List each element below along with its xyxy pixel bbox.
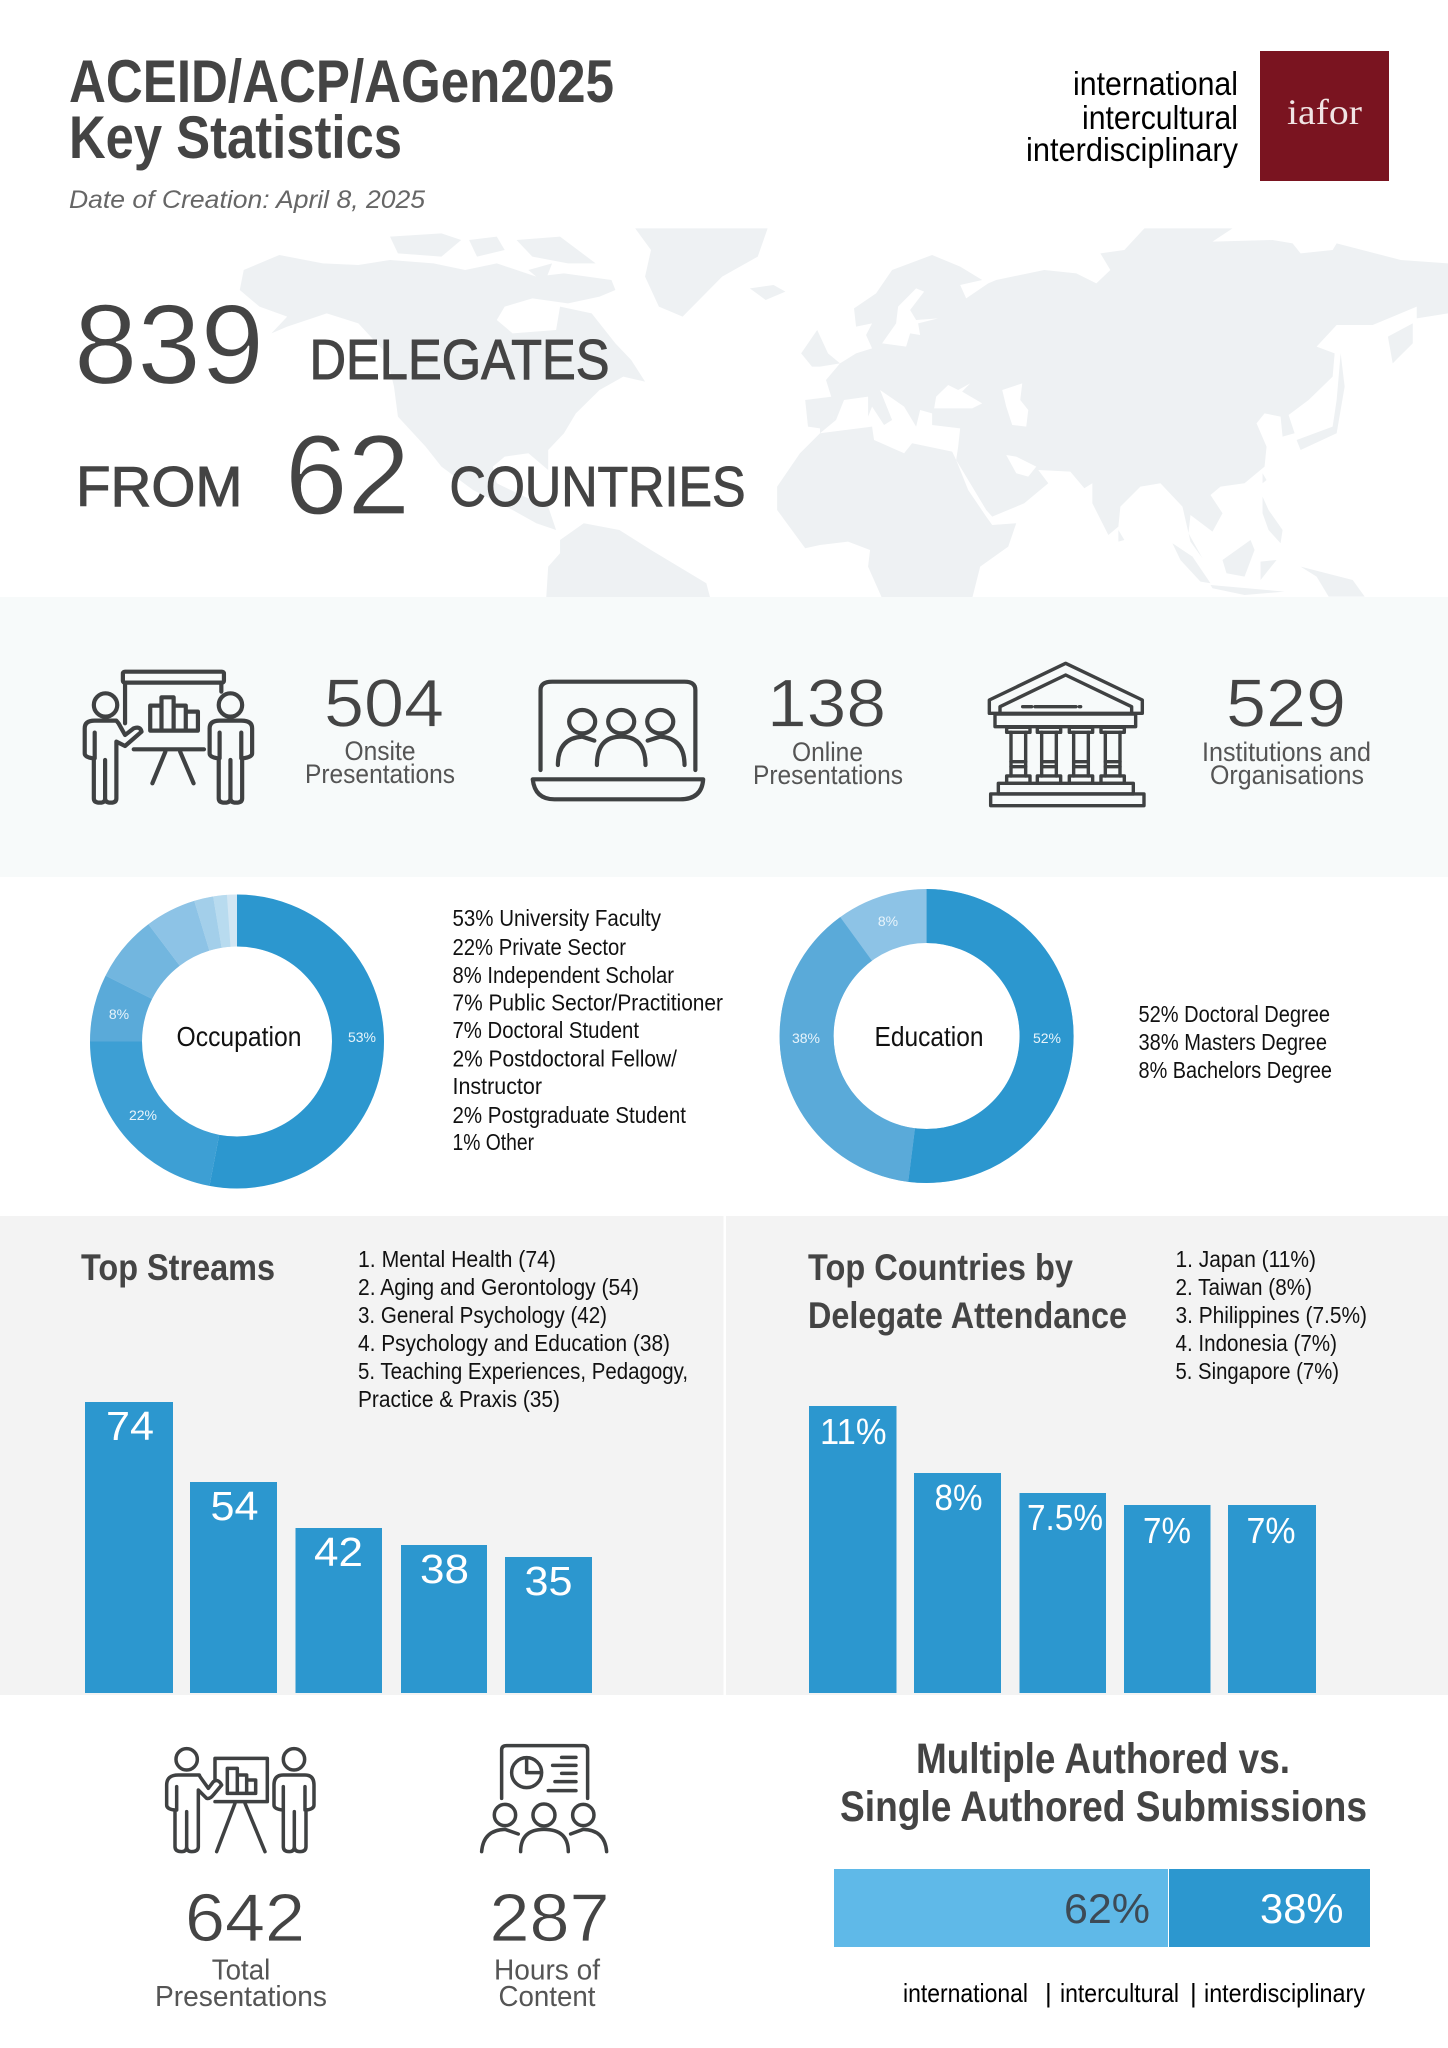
authored submissions heading: Single Authored Submissions [840, 1783, 1367, 1831]
bar chart: top streams: 42 [314, 1529, 363, 1575]
occupation legend list [452, 905, 723, 1155]
authored submissions heading: Multiple Authored vs. [916, 1735, 1290, 1783]
top countries list: 4. Indonesia (7%) [1176, 1330, 1337, 1356]
education legend list [1138, 1001, 1332, 1083]
stat: 504 onsite presentations: Onsite [344, 736, 416, 766]
stat: 504 onsite presentations: Presentations [305, 759, 455, 789]
stat: 138 online presentations: 138 [767, 666, 886, 742]
icon: institution building [989, 663, 1144, 806]
chart: education donut [792, 913, 1061, 1156]
chart: education donut: 8% [878, 913, 898, 929]
stat: 138 online presentations: Presentations [753, 760, 903, 790]
bar chart: top countries: 7.5% [1027, 1497, 1103, 1538]
chart: occupation donut: 8% [109, 1006, 129, 1022]
stat: 642 total presentations: Total [212, 1954, 270, 1986]
headline delegates: DELEGATES [310, 328, 610, 392]
header title: ACEID/ACP/AGen2025 [69, 48, 614, 115]
stat: 287 hours of content [490, 1880, 610, 2013]
panel: top streams [0, 1216, 724, 1695]
stacked bar: multiple vs single authored: 38% [1260, 1885, 1344, 1932]
bar chart: top countries: 11% [820, 1411, 886, 1452]
stat: 529 institutions: 529 [1226, 666, 1346, 742]
stat: 642 total presentations [155, 1880, 327, 2013]
top streams heading: Top Streams [81, 1247, 275, 1288]
top countries list: 1. Japan (11%) [1176, 1246, 1316, 1272]
iafor logo: intercultural [1082, 99, 1238, 136]
bar chart: top streams: 54 [210, 1483, 258, 1529]
occupation legend list: 53% University Faculty [452, 905, 661, 931]
icon: total presentations [167, 1749, 314, 1852]
stacked bar: multiple vs single authored: 62% [1064, 1885, 1150, 1932]
chart: education donut: Education [874, 1021, 984, 1052]
stat: 287 hours of content: Hours of [494, 1954, 601, 1986]
footer tagline [903, 1978, 1365, 2008]
occupation legend list: 1% Other [452, 1129, 534, 1155]
icon: hours of content [482, 1746, 607, 1852]
authored submissions heading [840, 1735, 1367, 1831]
stat: 138 online presentations: Online [792, 737, 863, 767]
top countries heading [808, 1247, 1127, 1336]
stat: 138 online presentations [753, 666, 903, 790]
icon: online laptop audience [533, 682, 703, 799]
stat: 529 institutions [1202, 666, 1371, 790]
headline countries: FROM [76, 455, 242, 519]
headline countries: 62 [285, 412, 410, 538]
chart: occupation donut [109, 920, 376, 1162]
stat: 504 onsite presentations [305, 666, 455, 789]
stat: 642 total presentations: 642 [185, 1880, 305, 1956]
top countries heading: Top Countries by [808, 1247, 1073, 1288]
footer tagline: | [1190, 1978, 1197, 2008]
bar chart: top countries: 7% [1246, 1510, 1296, 1551]
chart: occupation donut: 53% [348, 1029, 376, 1045]
stat: 504 onsite presentations: 504 [324, 666, 444, 742]
footer tagline: | [1045, 1978, 1052, 2008]
chart: education donut: 38% [792, 1030, 820, 1046]
bar chart: top countries: 8% [934, 1477, 982, 1518]
stacked bar: multiple vs single authored [834, 1869, 1370, 1947]
headline countries: COUNTRIES [450, 455, 746, 519]
stat: 529 institutions: Organisations [1210, 760, 1364, 790]
education legend list: 52% Doctoral Degree [1138, 1001, 1330, 1027]
top streams list: 4. Psychology and Education (38) [358, 1330, 670, 1356]
top streams list: Practice & Praxis (35) [358, 1386, 560, 1412]
education legend list: 38% Masters Degree [1138, 1029, 1327, 1055]
top streams list: 1. Mental Health (74) [358, 1246, 556, 1272]
top countries heading: Delegate Attendance [808, 1295, 1127, 1336]
stat: 529 institutions: Institutions and [1202, 737, 1371, 767]
bar chart: top streams: 74 [106, 1403, 154, 1449]
chart: occupation donut: Occupation [176, 1021, 302, 1052]
date of creation: Date of Creation: April 8, 2025 [69, 186, 425, 214]
top countries list: 5. Singapore (7%) [1176, 1358, 1339, 1384]
top streams list: 5. Teaching Experiences, Pedagogy, [358, 1358, 688, 1384]
world map background [240, 228, 1448, 598]
footer tagline: intercultural [1060, 1978, 1179, 2008]
bar chart: top countries [809, 1406, 1316, 1693]
top countries list: 2. Taiwan (8%) [1176, 1274, 1312, 1300]
stat: 642 total presentations: Presentations [155, 1981, 327, 2013]
iafor logo [1026, 51, 1389, 181]
occupation legend list: 2% Postgraduate Student [452, 1102, 687, 1128]
footer tagline: international [903, 1978, 1028, 2008]
iafor logo: iafor [1287, 92, 1362, 132]
iafor logo: international [1073, 65, 1238, 102]
top countries list: 3. Philippines (7.5%) [1176, 1302, 1367, 1328]
headline countries [76, 412, 746, 538]
headline delegates [74, 282, 610, 408]
education legend list: 8% Bachelors Degree [1138, 1057, 1332, 1083]
bar chart: top streams [85, 1402, 592, 1693]
bar chart: top streams: 35 [524, 1558, 572, 1604]
occupation legend list: 7% Public Sector/Practitioner [452, 990, 723, 1016]
occupation legend list: 7% Doctoral Student [452, 1017, 640, 1043]
bar chart: top countries: 7% [1143, 1510, 1191, 1551]
bar chart: top streams: 38 [420, 1546, 469, 1592]
header title [69, 48, 614, 171]
chart: occupation donut: 22% [129, 1107, 157, 1123]
panel: top countries [726, 1216, 1448, 1695]
panel: presentations stats band [0, 597, 1448, 877]
headline delegates: 839 [74, 282, 264, 408]
top countries list [1176, 1246, 1367, 1384]
stat: 287 hours of content: Content [498, 1981, 596, 2013]
top streams list: 2. Aging and Gerontology (54) [358, 1274, 639, 1300]
header title: Key Statistics [69, 104, 402, 171]
footer tagline: interdisciplinary [1204, 1978, 1365, 2008]
top streams list [358, 1246, 688, 1412]
occupation legend list: 22% Private Sector [452, 934, 626, 960]
chart: education donut: 52% [1033, 1030, 1061, 1046]
icon: onsite presenters [85, 672, 252, 803]
iafor logo: interdisciplinary [1026, 131, 1238, 168]
occupation legend list: 8% Independent Scholar [452, 962, 674, 988]
stat: 287 hours of content: 287 [490, 1880, 610, 1956]
occupation legend list: 2% Postdoctoral Fellow/ [452, 1046, 678, 1072]
top streams list: 3. General Psychology (42) [358, 1302, 607, 1328]
occupation legend list: Instructor [452, 1073, 542, 1099]
